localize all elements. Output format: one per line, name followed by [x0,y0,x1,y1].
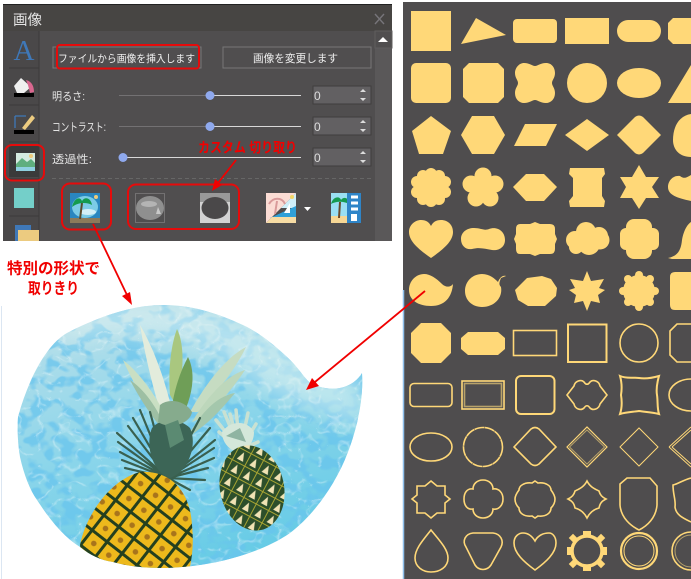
button: change image [223,47,371,68]
icon: text A: A [14,35,35,67]
big pineapple body [80,472,193,575]
slider: brightness: 0 [314,89,321,103]
icon: teal square [14,188,34,208]
arrow: shape library to cropped photo [306,291,425,390]
icon: beach with thumbnails [331,193,361,223]
icon: beach thumbnail [70,193,100,223]
label: custom crop: カスタム 切り取り [198,140,297,156]
title bar [3,5,392,31]
panel: shape library [403,2,691,579]
arrow: thumbnail to cropped photo [93,224,132,305]
icon: pen [14,115,35,134]
big pineapple crown [117,325,246,490]
shapes: row 6 solid [409,271,691,311]
shapes: row 7 solid and outline [411,323,505,363]
label: special shape crop: 特別の形状で [7,258,100,278]
shapes: row 1 solid [411,11,691,51]
sidebar [3,31,39,241]
title bar: 画像 [13,12,42,29]
highlight: special shape crop [62,184,111,230]
shapes: row 5 solid [409,219,691,259]
shapes: row 2 solid [411,63,691,103]
slider: contrast: コントラスト: [52,122,106,134]
shapes: row 9 outline [410,427,691,467]
slider: transparency [52,148,371,166]
icon: image tab selected [9,146,39,177]
photo: pineapples cropped to speech blob [18,305,362,568]
button: change image: 画像を変更します [253,52,338,65]
shapes: row 8 outline [410,376,691,414]
panel: image settings [3,4,392,241]
label: special shape crop: 取りきり [28,280,79,298]
slider: contrast [52,117,371,135]
icon: grey inverse ellipse [200,193,230,223]
shapes: row 11 outline [415,530,691,572]
highlight: sidebar image tab [5,145,44,180]
shapes: row 3 solid [412,114,691,157]
icon: diagonal beach [266,193,311,223]
scrollbar [375,31,392,241]
icon: paint bucket [14,78,34,97]
shapes: row 10 outline [412,478,691,530]
slider: brightness: 明るさ: [52,90,85,103]
slider: contrast: 0 [314,120,321,134]
small pineapple body [219,446,285,531]
icon: layers [15,225,39,241]
button: insert image from file: ファイルから画像を挿入します [58,52,195,65]
shapes: row 4 solid [411,165,691,209]
arrow: custom crop label to icons [212,160,236,191]
small pineapple crown [216,410,258,450]
slider: transparency: 透過性: [52,152,92,166]
icon: grey ellipse selection [136,194,164,222]
highlight: insert button [57,45,199,68]
button: insert image from file [53,47,201,68]
label: special shape crop [7,258,100,298]
highlight: custom crop [128,184,239,229]
slider: transparency: 0 [314,151,321,165]
slider: brightness [52,86,371,104]
